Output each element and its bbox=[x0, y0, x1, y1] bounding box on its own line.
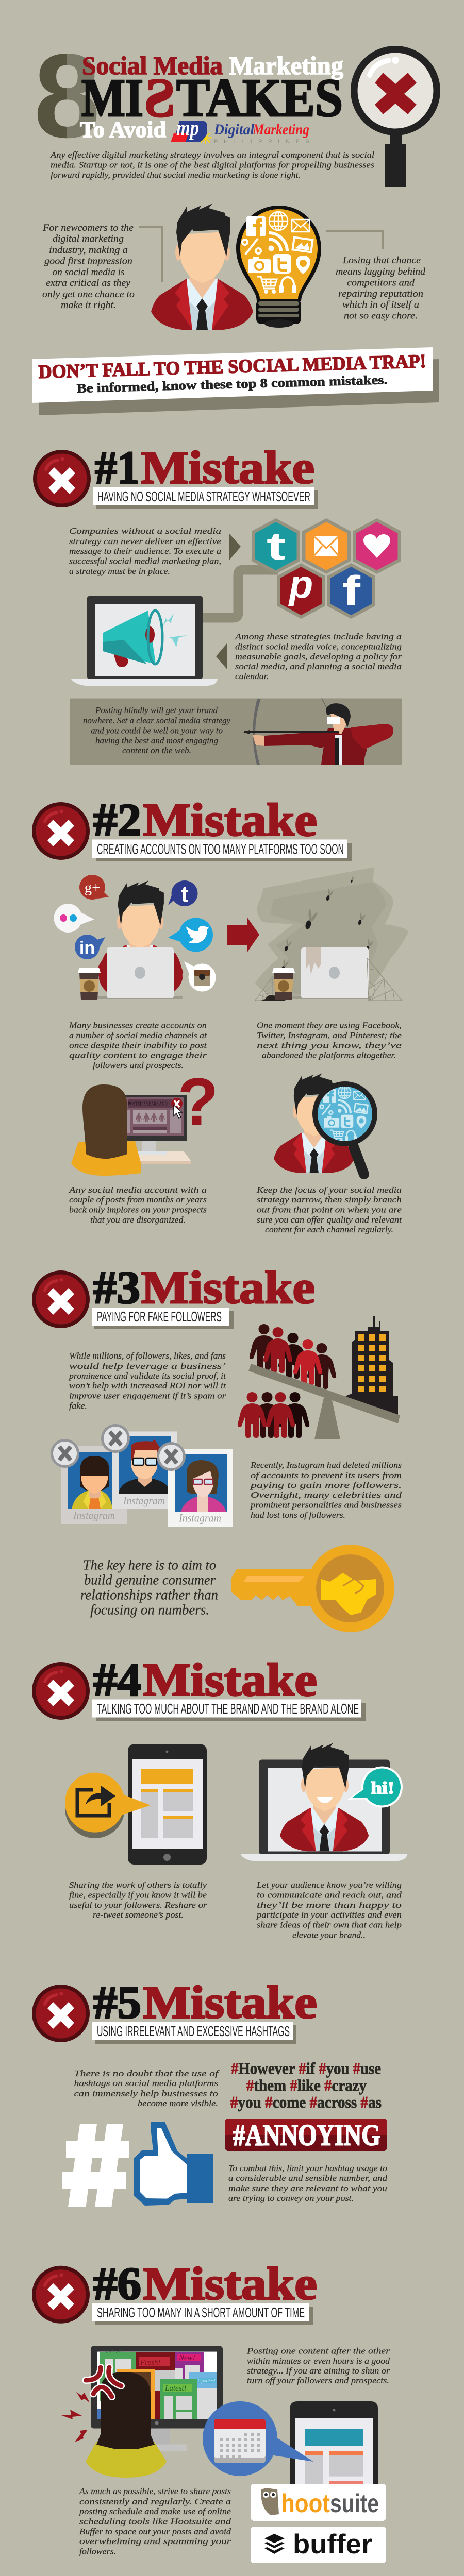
label: fresh: Fresh! bbox=[140, 2359, 160, 2367]
panel text: Posting blindly will get your brand bbox=[95, 705, 218, 715]
text: the key here bbox=[80, 1557, 218, 1618]
flies bbox=[281, 876, 373, 972]
wordmark hoot: hoot bbox=[281, 2489, 330, 2518]
text: many businesses: a number of social media channels at bbox=[69, 1030, 207, 1040]
text: newcomers note: extra critical as they bbox=[46, 278, 131, 289]
text: among these strategies bbox=[235, 632, 402, 681]
banner: don't fall to the social media trap bbox=[32, 347, 439, 415]
card caption: Instagram bbox=[123, 1494, 165, 1507]
bubble: twitter bbox=[168, 918, 213, 952]
text: there is no doubt: can immensely help businesses to bbox=[74, 2089, 218, 2098]
text: recently instagram: had lost tons of followers. bbox=[251, 1510, 345, 1520]
text: losing that chance: Losing that chance bbox=[342, 255, 421, 266]
icon: question mark: ? bbox=[177, 1064, 219, 1139]
arrow: pointer to text bbox=[216, 643, 227, 669]
people below bbox=[238, 1392, 309, 1438]
text: companies without a strategy bbox=[69, 526, 222, 576]
text: companies without a strategy: strategy can never deliver an effective bbox=[69, 536, 222, 546]
label: updates top: Updates! bbox=[106, 2350, 121, 2354]
text: posting one content: Posting one content after the other bbox=[246, 2346, 390, 2355]
text: losing that chance: which in of itself a bbox=[342, 299, 419, 310]
label: new: New! bbox=[178, 2354, 195, 2362]
text: companies without a strategy: message to their audience. To execute a bbox=[69, 546, 221, 556]
bubble: flickr bbox=[54, 904, 94, 933]
text: the key here: focusing on numbers. bbox=[90, 1602, 209, 1618]
logo word digital: Digital bbox=[213, 121, 255, 138]
text: while millions bbox=[69, 1351, 226, 1411]
mistake 5 heading bbox=[32, 1977, 317, 2044]
text: recently instagram bbox=[250, 1460, 402, 1520]
big numeral 8: 8 bbox=[34, 29, 101, 163]
illustration: fake instagram profile cards bbox=[51, 1424, 233, 1527]
text: companies without a strategy: Companies without a social media bbox=[69, 526, 221, 536]
illustration: phone with share bubble bbox=[65, 1744, 207, 1865]
calendar bubble bbox=[274, 2438, 313, 2462]
text: as much as possible: posting schedule and make use of online bbox=[79, 2506, 231, 2516]
text: let your audience: they’ll be more than happy to bbox=[257, 1900, 402, 1910]
icon: golden key with handshake bbox=[231, 1545, 394, 1632]
icon: twitter t: t bbox=[267, 524, 286, 568]
icon: heart bbox=[363, 534, 390, 558]
illustration: annoyed woman at flooded monitor bbox=[61, 2346, 223, 2478]
text: recently instagram: Overnight, many celebrities and bbox=[251, 1490, 402, 1500]
text: while millions: won’t help with increased ROI nor will it bbox=[69, 1381, 226, 1391]
text: there is no doubt: become more visible. bbox=[138, 2098, 218, 2108]
intro paragraph bbox=[50, 150, 374, 180]
mistake 1 heading bbox=[33, 442, 318, 509]
banner subhead: Be informed, know these top 8 common mistakes. bbox=[76, 373, 388, 396]
title: marketing: Marketing bbox=[229, 51, 343, 80]
illustration: tablet with calendar bubble bbox=[203, 2401, 378, 2488]
mistake 3 heading bbox=[32, 1262, 315, 1329]
text: while millions: would help leverage a business’ bbox=[69, 1361, 226, 1371]
text: sharing the work: Sharing the work of others is totally bbox=[69, 1880, 207, 1890]
logo mark bbox=[171, 121, 212, 144]
word mistake: Mistake bbox=[143, 2259, 317, 2309]
text: one moment: Twitter, Instagram, and Pinterest; the bbox=[257, 1030, 402, 1040]
icon: coffee cup bbox=[78, 968, 101, 1000]
text: sharing the work bbox=[69, 1880, 207, 1920]
card caption: Instagram bbox=[73, 1509, 115, 1522]
icon: light bulb with social icons bbox=[236, 206, 321, 328]
logo: buffer bbox=[251, 2527, 386, 2563]
text: losing that chance: repairing reputation bbox=[338, 289, 423, 299]
intro paragraph: media. Startup or not, it is one of the best digital platforms for propelling businesses bbox=[51, 160, 374, 170]
bubble: linkedin: in bbox=[79, 938, 95, 958]
text: as much as possible: scheduling tools like Hootsuite and bbox=[79, 2516, 231, 2527]
text: posting one content bbox=[246, 2346, 390, 2385]
text: keep the focus: out from that point on when you are bbox=[257, 1205, 402, 1215]
subtitle: PAYING FOR FAKE FOLLOWERS bbox=[97, 1309, 222, 1325]
panel text: having the best and most engaging bbox=[95, 736, 218, 745]
number: #4 bbox=[93, 1655, 141, 1706]
text: let your audience: participate in your activities and even bbox=[256, 1910, 402, 1920]
text: there is no doubt bbox=[74, 2069, 220, 2108]
text: the key here: build genuine consumer bbox=[84, 1572, 216, 1588]
spilled coffee bbox=[258, 995, 289, 1001]
text: as much as possible: As much as possible, strive to share posts bbox=[79, 2486, 231, 2496]
text: recently instagram: Recently, Instagram had deleted millions bbox=[250, 1460, 402, 1470]
social hex icons bbox=[252, 518, 401, 619]
text: among these strategies: social media, and planning a social media bbox=[235, 662, 402, 671]
panel text: nowhere. Set a clear social media strategy bbox=[83, 716, 230, 725]
badge: #annoying: #ANNOYING bbox=[233, 2119, 380, 2152]
text: let your audience: share ideas of their own that can help bbox=[257, 1920, 402, 1930]
text: newcomers note: industry, making a bbox=[49, 245, 128, 256]
logo: hootsuite bbox=[251, 2484, 386, 2521]
icon: x button bbox=[32, 802, 90, 860]
bubble: tumblr: t bbox=[181, 882, 189, 907]
text: keep the focus bbox=[256, 1185, 402, 1234]
text: the key here: relationships rather than bbox=[80, 1587, 218, 1602]
icon: thumbs up bbox=[134, 2122, 213, 2206]
illustration: man on laptop saying hi bbox=[241, 1743, 407, 1861]
text: losing that chance: competitors and bbox=[347, 277, 415, 289]
text: there is no doubt: hashtags on social media platforms bbox=[74, 2078, 218, 2088]
wordmark suite: suite bbox=[330, 2489, 379, 2518]
icon: envelope bbox=[314, 536, 338, 556]
people on beam bbox=[250, 1324, 336, 1389]
text: recently instagram: prominent personalities and businesses bbox=[250, 1500, 402, 1510]
panel text bbox=[83, 705, 230, 755]
text: recently instagram: of accounts to prevent its users from bbox=[251, 1470, 402, 1480]
anger mark bbox=[86, 2367, 121, 2397]
text: the key here: The key here is to aim to bbox=[83, 1557, 216, 1573]
text: as much as possible: Buffer to space out your posts and avoid bbox=[79, 2527, 231, 2536]
arrow: pointer to icons bbox=[229, 534, 241, 560]
header logo bbox=[171, 116, 309, 145]
bubble: linkedin bbox=[75, 935, 105, 959]
word mistake: Mistake bbox=[141, 442, 314, 494]
hashtag sentence: #However #if #you #use bbox=[231, 2059, 381, 2078]
mistake 4 heading bbox=[32, 1655, 366, 1721]
illustration: businessman bbox=[151, 204, 253, 330]
icon: coffee cup bbox=[272, 968, 295, 1000]
text: keep the focus: Keep the focus of your social media bbox=[256, 1185, 402, 1195]
text: one moment: next thing you know, they’ve bbox=[257, 1040, 402, 1050]
logo word philippines: PHILIPPINES bbox=[214, 139, 309, 145]
text: while millions: While millions, of followers, likes, and fans bbox=[69, 1351, 226, 1361]
illustration: abandoned laptop with cobwebs bbox=[255, 867, 408, 1001]
text: to combat this: make sure they are relevant to what you bbox=[228, 2183, 387, 2193]
logo word marketing: Marketing bbox=[252, 121, 309, 138]
icon: calendar bbox=[214, 2419, 266, 2463]
arrow: red right arrow bbox=[227, 917, 259, 953]
bubble: google plus bbox=[79, 875, 109, 900]
text: newcomers note: digital marketing bbox=[53, 233, 124, 244]
number: #6 bbox=[93, 2259, 141, 2309]
icon: owl bbox=[261, 2488, 279, 2515]
word mistake: Mistake bbox=[143, 1655, 317, 1706]
title: TAKES: TAKES bbox=[176, 67, 343, 128]
label: latest: Latest! bbox=[164, 2384, 187, 2393]
text: as much as possible: followers. bbox=[79, 2547, 116, 2556]
text: as much as possible: consistently and regularly. Create a bbox=[79, 2497, 231, 2506]
building bbox=[346, 1316, 398, 1417]
text: losing that chance: means lagging behind bbox=[336, 266, 426, 277]
word mistake: Mistake bbox=[143, 1977, 317, 2028]
card caption: Instagram bbox=[178, 1512, 221, 1524]
number: #5 bbox=[93, 1977, 141, 2028]
panel text: content on the web. bbox=[122, 745, 191, 755]
text: newcomers note: only get one chance to bbox=[42, 289, 135, 300]
lightning marks bbox=[61, 2392, 90, 2442]
banner headline: DON’T FALL TO THE SOCIAL MEDIA TRAP! bbox=[38, 351, 426, 383]
text: sharing the work: fine, especially if you know it will be bbox=[69, 1890, 207, 1900]
text: any social media account: back only implores on your prospects bbox=[69, 1205, 207, 1215]
connector line bbox=[203, 570, 278, 618]
text: many businesses: quality content to engage their bbox=[69, 1050, 207, 1060]
intro paragraph: forward rapidly, provided that social media marketing is done right. bbox=[51, 170, 301, 180]
text: many businesses: once despite their inability to post bbox=[69, 1040, 207, 1050]
text: recently instagram: paying to gain more followers. bbox=[250, 1480, 402, 1490]
woman's shirt bbox=[86, 2442, 167, 2478]
text: one moment: One moment they are using Facebook, bbox=[257, 1021, 402, 1030]
bubble: instagram bbox=[184, 961, 216, 991]
text: while millions: fake. bbox=[69, 1401, 87, 1411]
text: keep the focus: strategy narrow, then simply branch bbox=[257, 1195, 402, 1205]
text: any social media account: Any social media account with a bbox=[69, 1185, 207, 1195]
icon: white hashtag bbox=[62, 2124, 129, 2207]
text: let your audience: Let your audience know you’re willing bbox=[256, 1880, 402, 1890]
hashtag sentence bbox=[230, 2059, 382, 2111]
text: keep the focus: sure you can offer quality and relevant bbox=[257, 1215, 402, 1225]
text: one moment: abandoned the platforms altogether. bbox=[262, 1050, 396, 1060]
title: social media: Social Media bbox=[82, 51, 223, 80]
text: losing that chance: not so easy chore. bbox=[344, 310, 418, 321]
text: companies without a strategy: successful social medial marketing plan, bbox=[69, 556, 221, 566]
text: posting one content: turn off your followers and prospects. bbox=[247, 2376, 389, 2385]
icon: pinterest p: p bbox=[288, 563, 313, 606]
text: many businesses bbox=[69, 1021, 207, 1070]
mistake 2 heading bbox=[32, 795, 352, 861]
illustration: balance scale people vs building bbox=[238, 1316, 400, 1439]
panel: blindfolded archer bbox=[70, 698, 402, 765]
illustration: woman at outdated monitor bbox=[71, 1064, 219, 1176]
text: newcomers note: make it right. bbox=[61, 300, 116, 311]
hashtag sentence: #you #come #across #as bbox=[230, 2093, 382, 2111]
text: among these strategies: Among these strategies include having a bbox=[235, 632, 402, 641]
card 3 bbox=[168, 1449, 233, 1527]
icon: buffer stack bbox=[264, 2534, 285, 2554]
bubble: hi: hi! bbox=[371, 1779, 394, 1798]
text: any social media account: that you are disorganized. bbox=[90, 1215, 186, 1225]
bubble: tumblr bbox=[168, 880, 198, 907]
text: to combat this bbox=[228, 2163, 388, 2203]
title block bbox=[34, 29, 343, 163]
text: keep the focus: content for each channel regularly. bbox=[265, 1225, 393, 1234]
text: many businesses: followers and prospects. bbox=[93, 1060, 184, 1070]
icon: x button bbox=[32, 1270, 90, 1328]
logo mark letters: mp bbox=[176, 116, 199, 140]
text: newcomers note bbox=[42, 223, 135, 311]
text: let your audience: elevate your brand.. bbox=[292, 1930, 366, 1940]
text: let your audience bbox=[256, 1880, 402, 1940]
text: while millions: prominence and validate its social proof, it bbox=[69, 1371, 226, 1381]
cobweb left bbox=[255, 977, 272, 1001]
text: companies without a strategy: a strategy must be in place. bbox=[69, 566, 170, 576]
text: newcomers note: on social media is bbox=[53, 267, 125, 278]
text: among these strategies: calendar. bbox=[235, 671, 269, 681]
bubble: google plus: g+ bbox=[85, 879, 100, 896]
card 1 bbox=[61, 1446, 127, 1524]
text: let your audience: to communicate and reach out, and bbox=[257, 1890, 402, 1900]
mistake 6 heading bbox=[32, 2259, 317, 2325]
text: to combat this: To combat this, limit your hashtag usage to bbox=[228, 2163, 387, 2173]
subtitle: SHARING TOO MANY IN A SHORT AMOUNT OF TIME bbox=[97, 2304, 305, 2320]
cobweb right bbox=[367, 958, 402, 1001]
text: as much as possible bbox=[79, 2486, 231, 2556]
text: any social media account: couple of posts from months or years bbox=[69, 1195, 207, 1205]
word mistake: Mistake bbox=[143, 795, 317, 846]
icon: x button bbox=[32, 1985, 90, 2042]
text: to combat this: a considerable and sensible number, and bbox=[228, 2173, 388, 2183]
text: newcomers note: For newcomers to the bbox=[42, 223, 134, 233]
text: among these strategies: measurable goals, developing a policy for bbox=[235, 652, 402, 662]
title: to avoid: To Avoid bbox=[80, 117, 166, 142]
illustration: man with magnifying glass bbox=[274, 1073, 377, 1174]
number: #1 bbox=[95, 442, 139, 494]
icon: x button bbox=[33, 450, 91, 507]
word mistake: Mistake bbox=[141, 1262, 315, 1313]
text: as much as possible: overwhelming and spamming your bbox=[79, 2536, 231, 2546]
icon: magnifying glass with x bbox=[351, 46, 440, 187]
text: among these strategies: distinct social media voice, conceptualizing bbox=[235, 642, 402, 651]
text: newcomers note: good first impression bbox=[44, 256, 132, 267]
feed panels bbox=[97, 2349, 217, 2419]
smile bbox=[317, 1797, 333, 1803]
text: there is no doubt: There is no doubt that the use of bbox=[74, 2069, 220, 2078]
text: sharing the work: re-tweet someone’s post. bbox=[93, 1910, 184, 1920]
text: while millions: improve user engagement if it’s spam or bbox=[69, 1391, 226, 1400]
icon: x button bbox=[32, 2266, 90, 2324]
text: any social media account bbox=[69, 1185, 207, 1225]
card 2 bbox=[112, 1431, 177, 1509]
illustration: archer bbox=[243, 698, 393, 765]
hashtag sentence: #them #like #crazy bbox=[246, 2076, 367, 2095]
bubble: hi bbox=[347, 1766, 403, 1807]
text: sharing the work: useful to your followers. Reshare or bbox=[69, 1900, 207, 1910]
illustration: laptop with megaphone bbox=[71, 596, 218, 686]
title: MI: MI bbox=[81, 67, 143, 128]
woman's hair bbox=[96, 2372, 155, 2449]
icon: facebook f: f bbox=[342, 568, 361, 615]
subtitle: USING IRRELEVANT AND EXCESSIVE HASHTAGS bbox=[97, 2023, 290, 2039]
text: to combat this: are trying to convey on your post. bbox=[228, 2193, 354, 2203]
text: posting one content: strategy... If you are aiming to shun or bbox=[247, 2366, 390, 2376]
title: mirrored S: S bbox=[144, 67, 175, 129]
intro paragraph: Any effective digital marketing strategy involves an integral component that is social bbox=[50, 150, 374, 160]
text: one moment bbox=[257, 1021, 402, 1060]
panel text: and you could be well on your way to bbox=[91, 725, 223, 736]
text: losing that chance bbox=[336, 255, 426, 321]
number: #2 bbox=[93, 795, 141, 846]
label: updates: Updates! bbox=[197, 2378, 216, 2384]
wordmark buffer: buffer bbox=[293, 2529, 372, 2560]
x badges bbox=[51, 1424, 186, 1471]
text: posting one content: within minutes or even hours is a good bbox=[247, 2356, 390, 2366]
icon: x button bbox=[32, 1662, 90, 1720]
share bubble bbox=[65, 1773, 151, 1838]
subtitle: HAVING NO SOCIAL MEDIA STRATEGY WHATSOEVER bbox=[97, 488, 310, 504]
illustration: busy man with social bubbles bbox=[54, 875, 216, 1000]
label: posted 2 years ago: POSTED 2 YEARS AGO bbox=[128, 1101, 168, 1107]
text: many businesses: Many businesses create accounts on bbox=[69, 1021, 207, 1030]
number: #3 bbox=[93, 1262, 140, 1313]
